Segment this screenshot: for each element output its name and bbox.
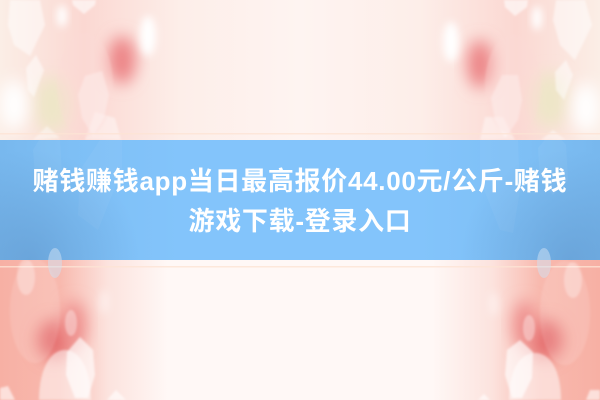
bottom translucent shapes <box>0 259 600 400</box>
top half tones <box>0 0 600 140</box>
top translucent hexagons <box>8 0 592 140</box>
bottom half tones <box>0 133 600 400</box>
title: 赌钱赚钱app当日最高报价44.00元/公斤-赌钱 <box>33 166 567 196</box>
title: 游戏下载-登录入口 <box>189 206 411 236</box>
blue band <box>0 127 600 278</box>
title <box>33 166 567 236</box>
